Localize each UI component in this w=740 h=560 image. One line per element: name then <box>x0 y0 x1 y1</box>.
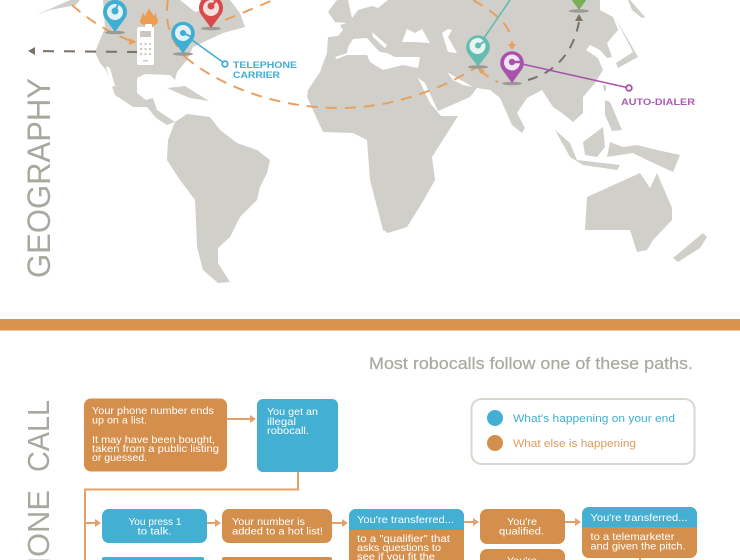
box: transferred to qualifier: You're transferred... <box>357 514 454 526</box>
section divider band <box>0 319 740 330</box>
grey dashed routes <box>32 22 579 80</box>
pin: telephone carrier with leader and label: CARRIER <box>233 70 280 81</box>
box: transferred to qualifier: asks questions to <box>357 542 441 554</box>
world map landmasses <box>36 0 707 283</box>
orange dashed call routes <box>72 0 510 108</box>
box: you press 1 <box>102 509 207 543</box>
panel: phone call flow <box>21 354 697 560</box>
box: phone number on a list: Your phone number ends <box>92 405 214 417</box>
box: transferred to telemarketer: and given the pitch. <box>590 540 686 552</box>
pin: auto-dialer with leader and label: AUTO-DIALER <box>621 97 695 108</box>
connector lines and arrows <box>85 415 640 560</box>
panel: geography world map <box>21 0 707 283</box>
pin shadow: green <box>569 9 589 13</box>
pin: red <box>199 0 223 30</box>
box: illegal robocall <box>257 399 338 472</box>
box: second path orange <box>222 557 332 560</box>
box: hot list: added to a hot list! <box>232 526 323 538</box>
box: transferred to telemarketer: to a telemarketer <box>590 531 675 543</box>
box: you press 1: You press 1 <box>128 516 182 528</box>
box: transferred to qualifier <box>349 509 464 560</box>
pin: auto-dialer with leader and label <box>500 51 695 108</box>
legend: What else is happening <box>513 438 636 450</box>
box: phone number on a list: up on a list. <box>92 414 147 426</box>
box: not qualified <box>480 549 565 560</box>
box: hot list <box>222 509 332 543</box>
orange arrowheads <box>129 38 516 74</box>
box: transferred to telemarketer: You're transferred... <box>590 512 688 524</box>
box: transferred to qualifier: to a "qualifier" that <box>357 533 450 545</box>
pin: telephone carrier with leader and label: TELEPHONE <box>233 60 297 71</box>
box: illegal robocall: illegal <box>267 416 296 428</box>
box: phone number on a list: It may have been bought, <box>92 434 215 446</box>
icon: flame <box>140 8 158 27</box>
box: phone number on a list: taken from a public listing <box>92 443 219 455</box>
pin: blue west <box>103 0 127 34</box>
box: hot list: Your number is <box>232 516 305 528</box>
grey arrowheads <box>28 14 583 55</box>
legend: What's happening on your end <box>513 413 675 425</box>
box: you press 1: to talk. <box>138 526 172 538</box>
pin: telephone carrier with leader and label <box>171 22 297 81</box>
box: you're qualified: qualified. <box>499 526 544 538</box>
box: you're qualified <box>480 509 565 544</box>
pin: teal with leader <box>466 0 510 69</box>
seas cut out of the map <box>106 0 473 87</box>
box: second path blue <box>102 557 204 560</box>
box: phone number on a list: or guessed. <box>92 452 147 464</box>
icon: telephone handset <box>137 24 154 65</box>
heading: phone call <box>21 400 56 560</box>
subtitle: Most robocalls follow one of these paths. <box>369 354 693 373</box>
legend <box>472 399 694 464</box>
box: illegal robocall: You get an <box>267 406 318 418</box>
pin: green <box>568 0 590 10</box>
box: you're qualified: You're <box>507 516 537 528</box>
box: illegal robocall: robocall. <box>267 425 309 437</box>
box: phone number on a list <box>84 398 227 472</box>
heading: phone call: CALL <box>21 400 56 472</box>
box: transferred to telemarketer <box>582 507 697 558</box>
heading: geography: GEOGRAPHY <box>21 78 57 278</box>
